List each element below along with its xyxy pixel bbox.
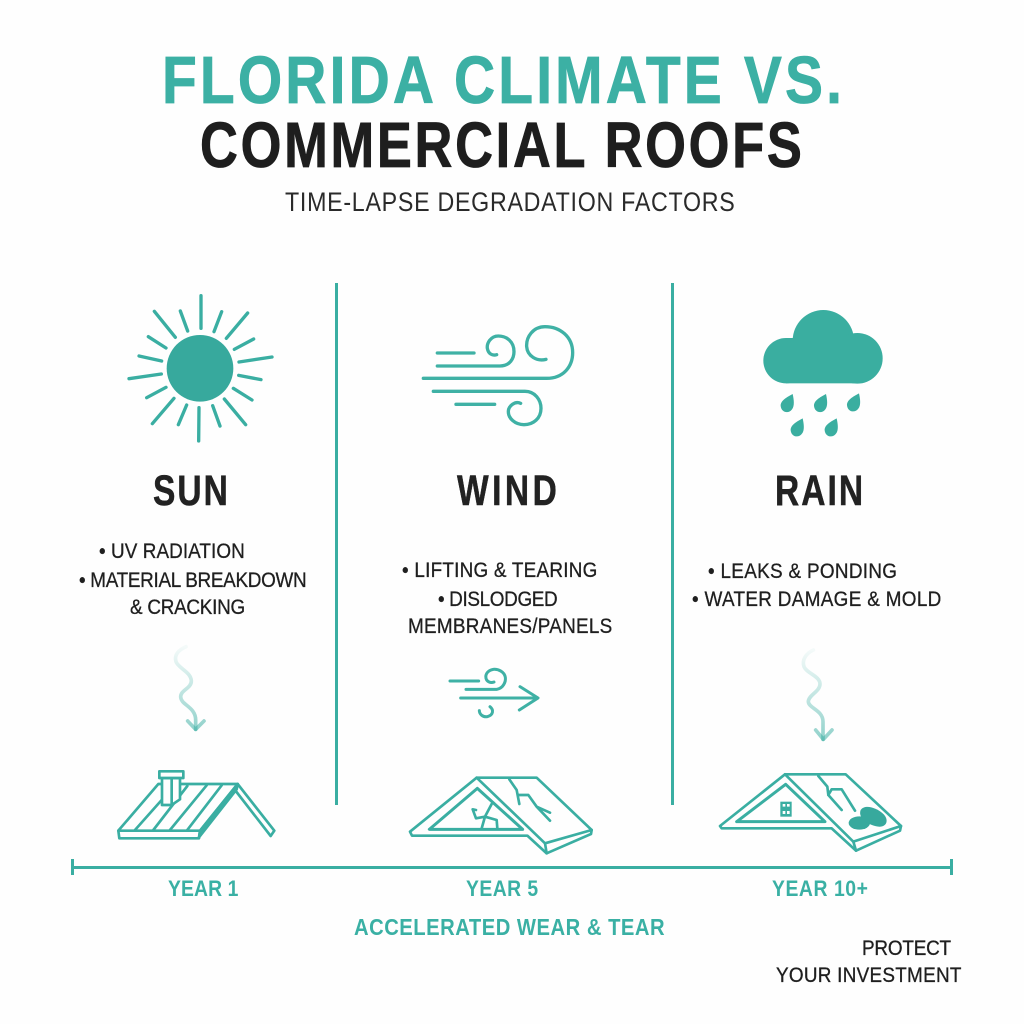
label: year 5: YEAR 5 (466, 877, 538, 901)
label: year 1: YEAR 1 (168, 877, 238, 901)
arrow: sun wavy down arrow (176, 647, 204, 729)
heading: rain: RAIN (775, 467, 863, 515)
callout: protect your investment (776, 937, 961, 987)
text block: sun effects: & CRACKING (130, 596, 245, 619)
text block: sun effects (79, 540, 307, 619)
text block: sun effects: • MATERIAL BREAKDOWN (79, 569, 307, 592)
label: year 10+: YEAR 10+ (772, 877, 868, 901)
heading: wind: WIND (457, 467, 557, 515)
caption: accelerated wear and tear: ACCELERATED WEAR & TEAR (354, 914, 665, 940)
title line 2: COMMERCIAL ROOFS (200, 110, 802, 181)
heading: sun: SUN (153, 467, 228, 515)
subtitle: TIME-LAPSE DEGRADATION FACTORS (285, 187, 735, 217)
text block: rain effects: • LEAKS & PONDING (708, 560, 897, 583)
timeline (71, 859, 953, 875)
text block: sun effects: • UV RADIATION (99, 540, 245, 563)
icon: year 5 cracked roof (410, 778, 592, 853)
arrow: wind arrow (450, 669, 538, 717)
column divider left (335, 283, 338, 805)
text block: wind effects: MEMBRANES/PANELS (408, 615, 612, 638)
text block: wind effects: • DISLODGED (438, 588, 558, 611)
callout: protect your investment: PROTECT (862, 937, 951, 960)
arrow: rain wavy down arrow (803, 650, 832, 739)
icon: year 1 intact roof (118, 771, 274, 838)
column divider right (671, 283, 674, 805)
icon: rain cloud (763, 310, 883, 436)
text block: wind effects (402, 559, 612, 638)
callout: protect your investment: YOUR INVESTMENT (776, 964, 961, 987)
text block: wind effects: • LIFTING & TEARING (402, 559, 597, 582)
title (162, 44, 842, 181)
icon: sun (129, 296, 272, 441)
title line 1: FLORIDA CLIMATE VS. (162, 44, 842, 118)
icon: wind (423, 327, 573, 425)
text block: rain effects: • WATER DAMAGE & MOLD (692, 588, 941, 611)
icon: year 10 leaking roof (720, 774, 901, 851)
text block: rain effects (692, 560, 941, 611)
